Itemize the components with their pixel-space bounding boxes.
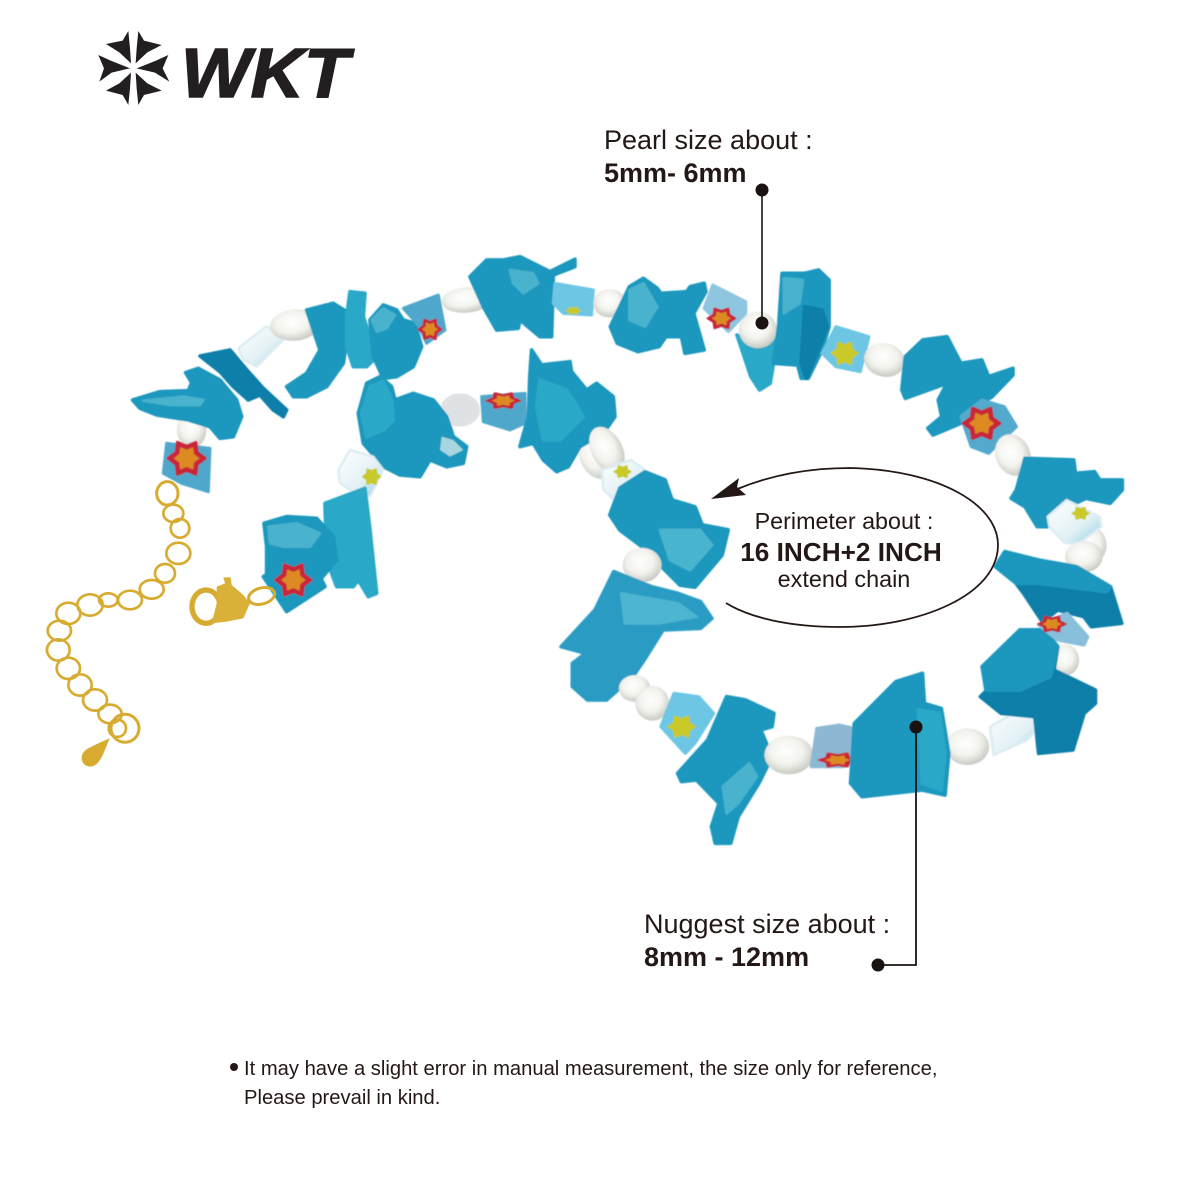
millefiori bead — [704, 285, 746, 332]
millefiori bead — [822, 327, 869, 372]
pearl — [269, 307, 321, 343]
pearl — [860, 339, 909, 381]
pearl — [946, 728, 989, 765]
gold extension chain and clasp — [47, 482, 277, 767]
value: 5mm- 6mm — [604, 158, 747, 188]
white bead with star — [338, 450, 383, 497]
pearl — [440, 393, 480, 427]
millefiori bead — [482, 393, 525, 430]
pearl — [177, 412, 206, 448]
label: Perimeter about : — [755, 508, 933, 534]
lobster clasp — [192, 577, 277, 623]
nugget — [561, 572, 712, 700]
callout: nugget size — [644, 721, 922, 972]
pearl — [582, 421, 632, 479]
white bead — [990, 707, 1041, 755]
footnote: It may have a slight error in manual measurement, the size only for reference, — [244, 1058, 937, 1080]
white bead — [238, 326, 283, 367]
value: 16 INCH+2 INCH — [740, 537, 942, 567]
chain links — [47, 482, 190, 723]
pearl — [623, 548, 662, 582]
footnote — [230, 1058, 937, 1109]
callout: perimeter — [711, 468, 998, 627]
pearl — [595, 289, 626, 317]
pearl — [764, 736, 813, 774]
arc arrow — [711, 468, 998, 627]
logo wordmark: WKT — [181, 34, 355, 112]
necklace segment: bottom strand — [561, 541, 1122, 843]
nugget — [520, 350, 615, 472]
pearl — [1051, 644, 1079, 676]
value: 8mm - 12mm — [644, 942, 809, 972]
nugget — [325, 488, 377, 597]
millefiori bead — [1038, 613, 1088, 645]
pearl — [593, 289, 623, 317]
pearl — [989, 429, 1037, 481]
pearl pair — [619, 675, 669, 721]
label: Nuggest size about : — [644, 909, 890, 939]
pearl — [441, 285, 493, 315]
footnote: Please prevail in kind. — [244, 1087, 440, 1109]
nugget: centre bottom of inner arc — [610, 472, 728, 587]
millefiori bead — [811, 725, 864, 767]
logo: WKT — [98, 31, 355, 112]
end ring — [109, 714, 139, 742]
pearl — [739, 312, 777, 348]
teardrop charm — [82, 738, 110, 767]
necklace: main strand — [133, 257, 1122, 843]
pearl — [1065, 541, 1103, 572]
label: Pearl size about : — [604, 125, 813, 155]
white bead with star — [1048, 500, 1101, 543]
callout: pearl size — [604, 125, 813, 329]
millefiori bead — [661, 693, 714, 753]
note: extend chain — [778, 566, 910, 592]
nugget — [358, 377, 467, 477]
pearl — [1072, 526, 1107, 564]
leader line — [872, 721, 922, 971]
white bead with star — [602, 460, 645, 500]
necklace segment: top right strand — [582, 270, 1122, 564]
millefiori bead — [553, 283, 593, 315]
millefiori bead with red flower — [263, 553, 325, 612]
necklace segment: left and inner strand — [133, 257, 623, 612]
pearl — [572, 428, 622, 485]
millefiori bead with red flower — [163, 443, 210, 492]
leader line — [756, 184, 768, 329]
millefiori bead — [403, 295, 445, 343]
logo mark: snowflake — [98, 31, 169, 105]
millefiori bead — [961, 400, 1016, 453]
